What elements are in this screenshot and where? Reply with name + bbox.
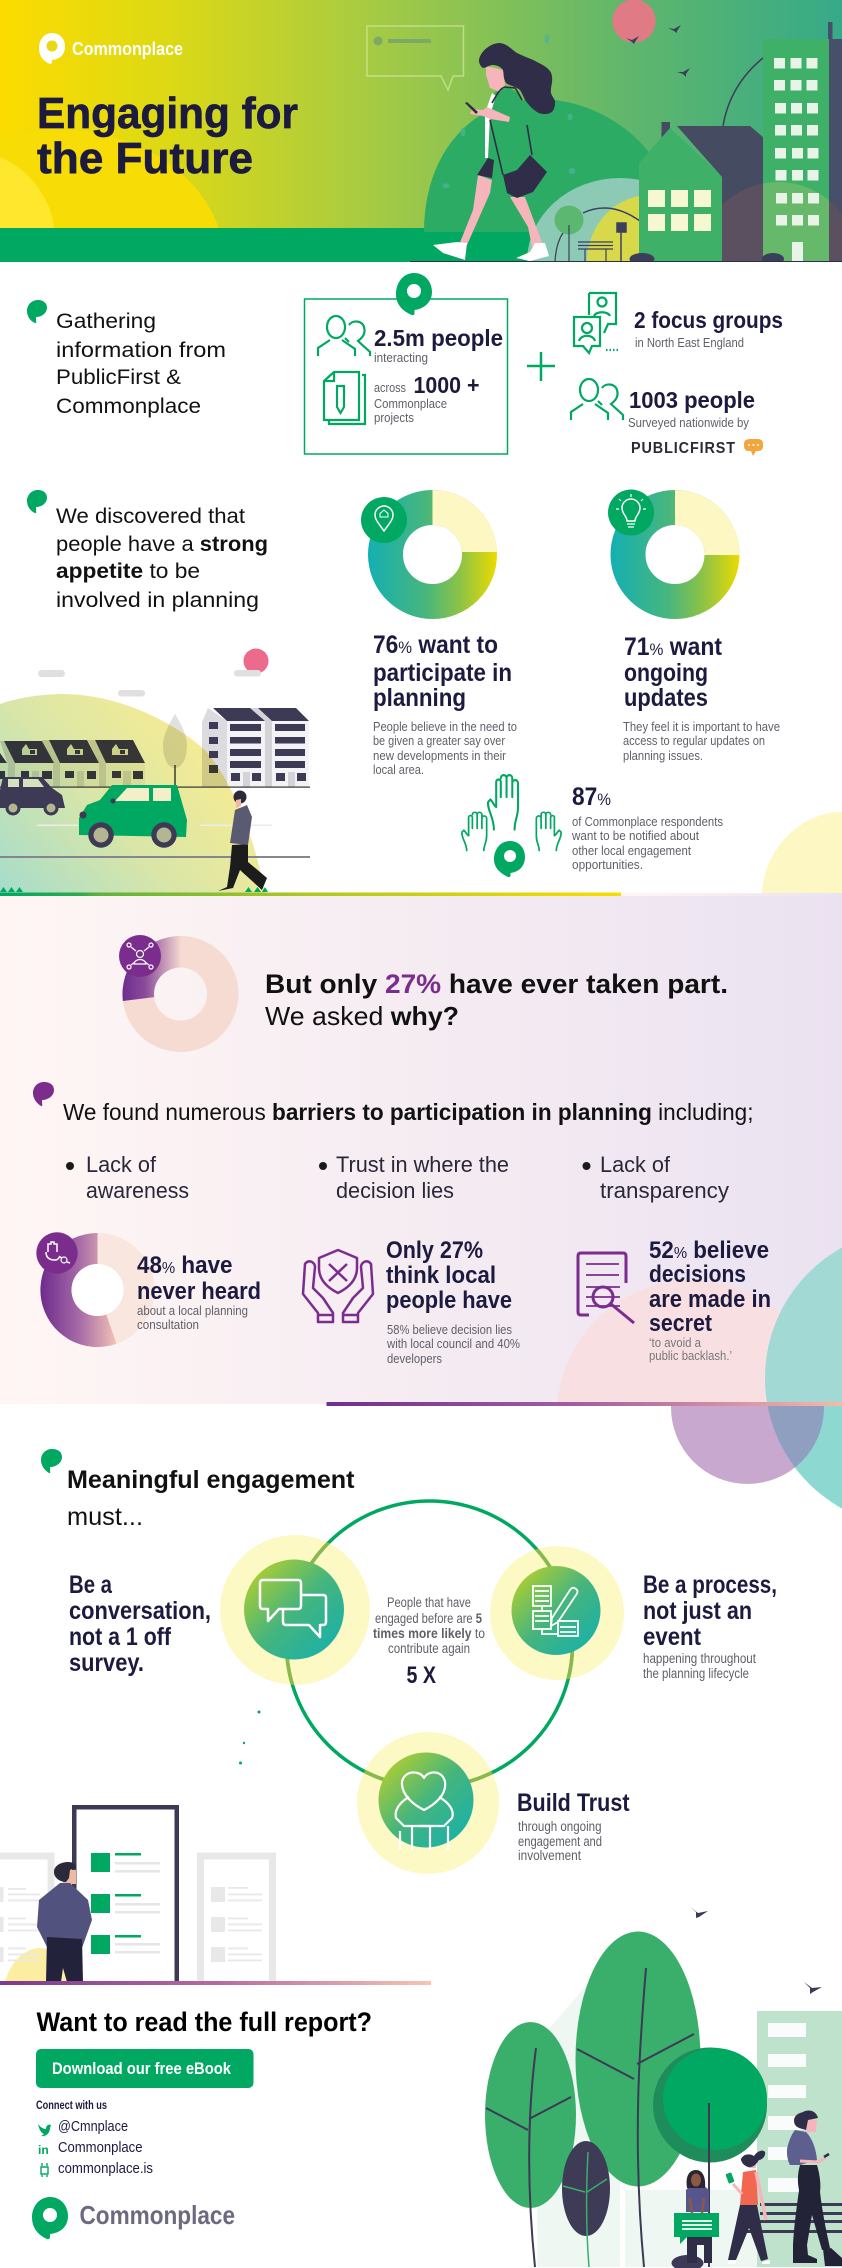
text: be a process: Be a process, [643, 1571, 777, 1599]
logo: Commonplace white [39, 33, 183, 64]
grey boards [0, 1856, 272, 1981]
illustration: street scene [0, 648, 310, 893]
stat: 2.5m people: 2.5m people [374, 325, 503, 351]
text: be a process: not just an [643, 1597, 752, 1625]
social: twitter [38, 2119, 128, 2136]
rainbow arcs [527, 178, 639, 261]
box: Commonplace data [304, 273, 508, 454]
stat: only 27%: 58% believe decision lies [387, 1322, 512, 1337]
stat: only 27%: think local [386, 1262, 496, 1289]
list: barrier lack of awareness: awareness [86, 1178, 189, 1203]
stat: 48% have never heard: never heard [137, 1278, 261, 1305]
text: be a process: happening throughout [643, 1651, 756, 1666]
stat: only 27%: Only 27% [386, 1237, 483, 1264]
icon: raised hands and marker [462, 775, 561, 877]
text: across 1000+ projects: Commonplace [374, 397, 447, 411]
list: barrier lack of awareness: Lack of [86, 1152, 157, 1177]
stat: 87%: want to be notified about [571, 828, 699, 843]
icon: green teardrop bullet [27, 300, 47, 323]
hill gradient [0, 694, 265, 893]
sun [612, 0, 656, 43]
stat: 76% want to participate: new developments in their [373, 748, 507, 763]
icon: heart in hands [378, 1752, 474, 1850]
heading: meaningful engagement must [67, 1466, 355, 1531]
divider bar green to yellow [0, 892, 621, 896]
birds [690, 1907, 822, 1994]
text: build trust: through ongoing [518, 1819, 602, 1834]
rain drops [442, 34, 576, 188]
stat: 76% want to participate: planning [373, 684, 466, 712]
clouds [38, 670, 261, 696]
panel: gathering information [27, 273, 783, 457]
text: five times more likely: contribute again [388, 1641, 470, 1656]
text: be a process: event [643, 1623, 702, 1651]
stat: 48% have never heard: 48% have [137, 1252, 232, 1279]
heading: only 27% have taken part: We asked why? [265, 1001, 459, 1031]
decorative circles [558, 1248, 842, 1402]
icon: two people [571, 379, 623, 420]
chart: 48% donut [36, 1232, 139, 1347]
sun [244, 648, 268, 674]
panel: barriers to participation [0, 893, 842, 1406]
text: barriers heading: We found numerous barriers to participation in planning including; [63, 1099, 754, 1125]
apartment block [202, 708, 309, 787]
text: be a conversation: Be a [69, 1571, 113, 1599]
stat: 71% want ongoing updates: 71% want [624, 633, 723, 661]
icon: hand with magnifier [36, 1232, 78, 1274]
stat: 52% believe: 52% believe [649, 1237, 769, 1264]
stat: 87% [571, 783, 723, 872]
text: connect with us: Connect with us [36, 2100, 107, 2112]
bench [742, 2203, 842, 2233]
stat: 48% have never heard: about a local planning [137, 1303, 248, 1318]
stat: 87%: 87% [572, 783, 611, 811]
man walking [218, 790, 267, 891]
button: download ebook: Download our free eBook [52, 2059, 231, 2078]
text: gathering heading [56, 310, 226, 418]
stat: 71% want ongoing updates: access to regular updates on [623, 733, 765, 748]
icon: green teardrop bullet [41, 1449, 62, 1473]
text: interacting: interacting [374, 351, 428, 365]
button: download ebook [36, 2049, 254, 2088]
bench [578, 242, 613, 262]
text: build trust: Build Trust [517, 1789, 630, 1817]
text: gathering heading: Gathering [56, 310, 156, 333]
logo: PublicFirst: PUBLICFIRST [631, 440, 736, 457]
stat: 1003 people [628, 387, 755, 430]
stat: 2 focus groups [634, 307, 783, 350]
stat: 48% have never heard [137, 1252, 261, 1332]
stat: only 27%: people have [386, 1287, 512, 1314]
stat: 52% believe: are made in [649, 1286, 771, 1313]
speech bubble [367, 26, 464, 90]
stat: 76% want to participate [373, 631, 517, 777]
man [37, 1862, 92, 1982]
building [757, 2011, 842, 2267]
list: barrier transparency [582, 1152, 729, 1203]
icon: location pin [361, 497, 407, 543]
text: five times more likely [373, 1595, 485, 1689]
woman with sign [672, 2170, 719, 2268]
stat: 76% want to participate: local area. [373, 762, 424, 777]
text: build trust: involvement [518, 1848, 581, 1863]
stat: 52% believe: secret [649, 1310, 712, 1337]
grass [0, 887, 268, 892]
divider bar purple to peach [0, 1981, 431, 1985]
street lamp [583, 208, 640, 262]
text: be a conversation: not a 1 off [69, 1623, 172, 1651]
list: barrier trust: Trust in where the [336, 1152, 509, 1177]
stat: only 27%: developers [387, 1351, 442, 1366]
icon: light bulb [608, 490, 654, 536]
decorative circles below barriers section [671, 1406, 842, 1508]
small tree [554, 206, 584, 262]
text: five times more likely: engaged before are 5 [375, 1611, 482, 1626]
stat: 71% want ongoing updates: updates [624, 684, 708, 712]
chart: 71% donut [608, 490, 740, 602]
house [639, 122, 763, 262]
logo: Commonplace white: Commonplace [72, 39, 183, 59]
logo: Commonplace footer: Commonplace [80, 2200, 235, 2230]
heading: only 27% have taken part: But only 27% have ever taken part. [265, 969, 728, 999]
dark car [0, 777, 65, 816]
stat: 76% want to participate: People believe in the need to [373, 719, 517, 734]
text: discovered heading [56, 505, 268, 612]
text: gathering heading: PublicFirst & [56, 366, 181, 389]
tree 2 [576, 1932, 700, 2267]
panel: header banner [0, 0, 842, 262]
green car [79, 785, 187, 848]
text: gathering heading: Commonplace [56, 395, 201, 418]
text: build trust: engagement and [518, 1834, 602, 1849]
decorative yellow blob [762, 812, 842, 893]
heading: meaningful engagement must: Meaningful engagement [67, 1466, 355, 1494]
illustration: woman walking [433, 43, 555, 261]
stat: 52% believe: ‘to avoid a [649, 1335, 702, 1350]
list: barrier transparency: transparency [600, 1178, 729, 1203]
chart: 76% donut [361, 490, 497, 602]
heading: meaningful engagement must: must... [67, 1503, 143, 1531]
diagram: engagement cycle [220, 1501, 624, 1874]
stat: 76% want to participate: 76% want to [373, 631, 498, 659]
text: gathering heading: information from [56, 339, 226, 362]
woman with phone [787, 2110, 842, 2266]
text: five times more likely: People that have [387, 1595, 471, 1610]
woman in orange [725, 2151, 770, 2264]
text: across 1000+ projects: across [374, 381, 406, 395]
stat: 2 focus groups: in North East England [635, 336, 744, 350]
icon: focus group chat [574, 293, 620, 353]
stat: 1003 people: Surveyed nationwide by [628, 416, 750, 430]
stat: 87%: other local engagement [572, 843, 691, 858]
icon: Commonplace marker [396, 273, 432, 315]
text: discovered heading: people have a strong [56, 533, 268, 556]
social: website: commonplace.is [58, 2161, 153, 2177]
social: twitter: @Cmnplace [58, 2119, 128, 2135]
heading: want to read: Want to read the full report? [36, 2007, 372, 2037]
antenna arc [723, 58, 763, 126]
stat: 76% want to participate: be given a greater say over [373, 733, 506, 748]
icon: plus [527, 352, 555, 381]
icon: green teardrop bullet [27, 490, 47, 513]
social: linkedin: Commonplace [58, 2140, 142, 2156]
text: be a process: the planning lifecycle [643, 1666, 749, 1681]
stat: 48% have never heard: consultation [137, 1317, 199, 1332]
icon: two people [318, 316, 370, 356]
text: be a conversation: survey. [69, 1649, 144, 1677]
icon: shield and hands [303, 1250, 373, 1322]
icon: document magnifier [578, 1253, 634, 1323]
stat: 71% want ongoing updates: planning issues. [623, 748, 703, 763]
illustration: trees and people [485, 1907, 842, 2268]
icon: process plan and pencil [512, 1566, 600, 1655]
stat: 52% believe [649, 1237, 771, 1363]
stat: only 27%: with local council and 40% [386, 1336, 520, 1351]
chart: 27% donut [119, 935, 223, 1036]
ground line [410, 261, 842, 262]
stat: only 27% [386, 1237, 520, 1366]
tree 1 [485, 2022, 576, 2267]
illustration: man at information boards [0, 1807, 272, 1982]
text: across 1000+ projects: projects [374, 411, 414, 425]
icon: document with pencil [324, 372, 365, 424]
text: discovered heading: involved in planning [56, 589, 259, 612]
social: linkedin: in [38, 2143, 49, 2157]
stat: 2 focus groups: 2 focus groups [634, 307, 783, 333]
text: discovered heading: We discovered that [56, 505, 245, 528]
text: discovered heading: appetite to be [56, 560, 200, 583]
text: across 1000+ projects [374, 372, 480, 425]
divider bar purple [326, 1402, 842, 1406]
panel: call to action [32, 2007, 372, 2239]
icon: network person [119, 935, 161, 977]
title [37, 89, 298, 183]
text: build trust [517, 1789, 630, 1863]
text: across 1000+ projects: 1000 + [414, 372, 480, 398]
icon: speech bubbles [244, 1560, 344, 1660]
tree [163, 714, 187, 787]
stat: 71% want ongoing updates: ongoing [624, 659, 708, 687]
text: five times more likely: 5 X [406, 1662, 436, 1689]
panel: strong appetite [0, 490, 842, 896]
stat: 71% want ongoing updates: They feel it is important to have [623, 719, 780, 734]
stat: 87%: opportunities. [572, 857, 643, 872]
stat: 52% believe: decisions [649, 1261, 746, 1288]
row of houses [0, 740, 145, 787]
list: barrier transparency: Lack of [600, 1152, 671, 1177]
tall building [630, 22, 842, 261]
main board [74, 1807, 177, 1981]
tree 3 [653, 2048, 767, 2267]
text: be a conversation [69, 1571, 211, 1677]
list: barrier trust [319, 1152, 509, 1203]
title: Engaging for [37, 89, 298, 138]
text: be a conversation: conversation, [69, 1597, 211, 1625]
birds [626, 25, 690, 77]
panel: meaningful engagement [41, 1449, 777, 1874]
heading: only 27% have taken part [265, 969, 728, 1031]
icon: purple teardrop bullet [33, 1082, 54, 1106]
title: the Future [37, 134, 253, 183]
list: barrier trust: decision lies [336, 1178, 454, 1203]
stat: 76% want to participate: participate in [373, 659, 512, 687]
stat: 1003 people: 1003 people [629, 387, 755, 413]
dark leaf [562, 2141, 610, 2267]
text: five times more likely: times more likely to [373, 1626, 485, 1641]
list: barrier lack of awareness [66, 1152, 189, 1203]
stat: 52% believe: public backlash.’ [649, 1348, 732, 1363]
stat: 87%: of Commonplace respondents [572, 814, 723, 829]
logo: Commonplace footer [32, 2197, 235, 2239]
text: be a process [643, 1571, 777, 1681]
stat: 71% want ongoing updates [623, 633, 780, 763]
